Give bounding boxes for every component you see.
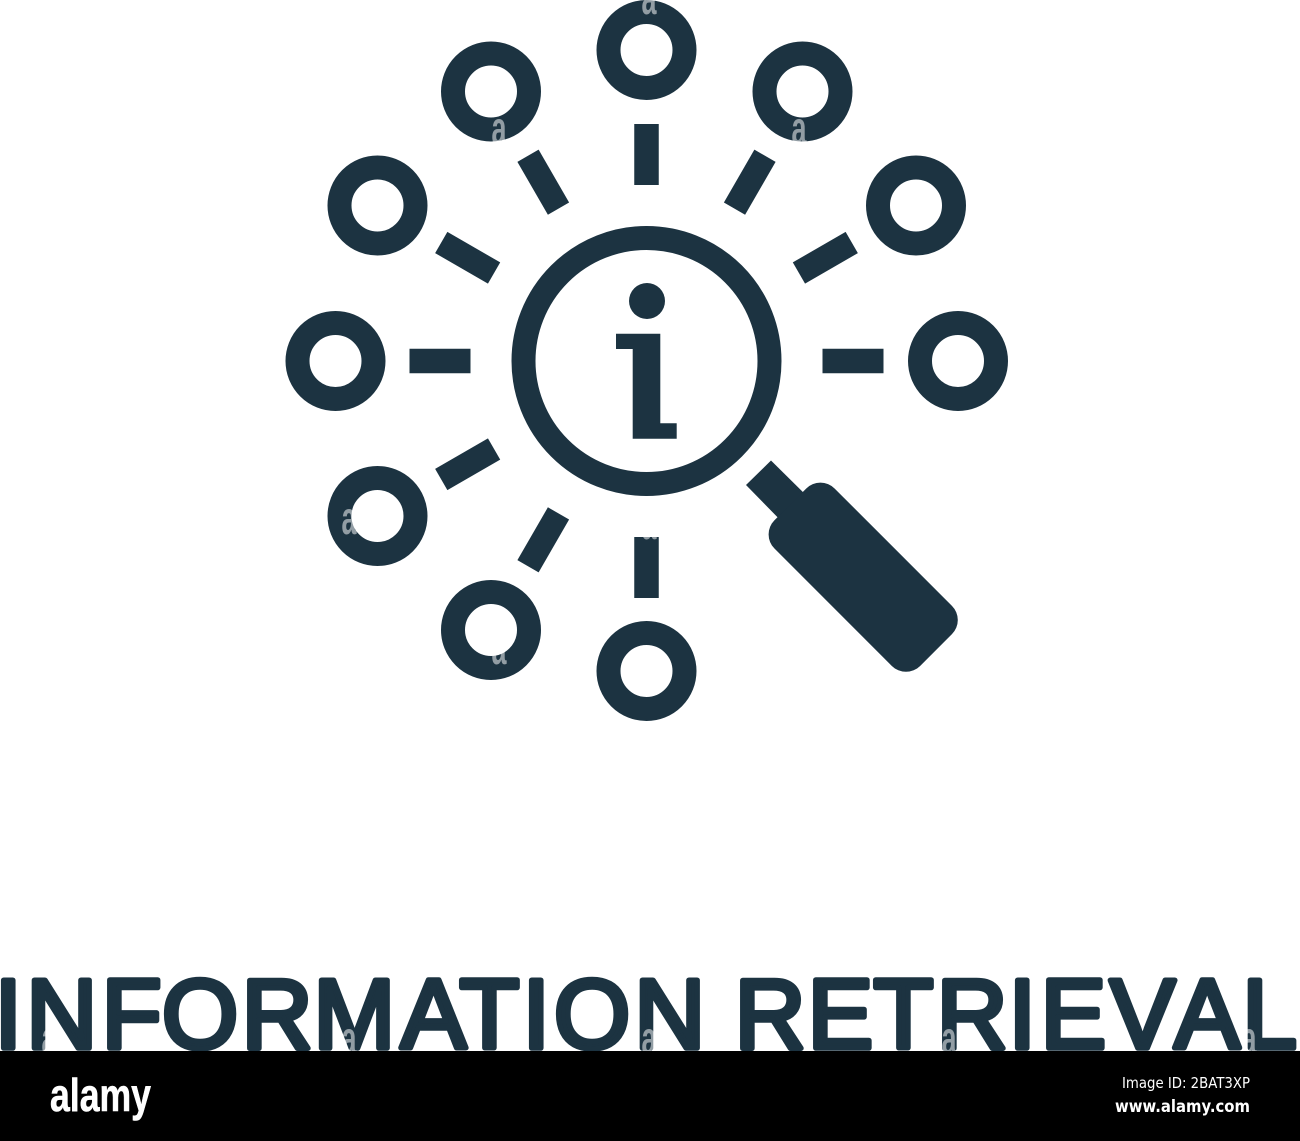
watermark glyphs: a [42, 1012, 57, 1064]
icon: magnifier handle [746, 460, 966, 680]
watermark glyphs: a [642, 497, 657, 549]
watermark glyphs: a [792, 102, 807, 154]
website address: www.alamy.com [1115, 1097, 1250, 1117]
watermark glyphs: a [642, 1012, 657, 1064]
icon: ring of outer nodes [298, 12, 996, 709]
footer band [0, 1051, 1300, 1141]
icon: letter i inside lens [616, 283, 677, 439]
watermark glyphs: a [342, 1012, 357, 1064]
watermark glyphs: a [492, 102, 507, 154]
watermark glyphs: a [342, 492, 357, 544]
watermark glyphs: a [492, 622, 507, 674]
icon: information retrieval magnifier with radiating nodes [298, 12, 996, 709]
icon: radial connector dashes [410, 124, 884, 598]
watermark glyphs: a [942, 1012, 957, 1064]
logo: alamy: alamy [50, 1069, 151, 1121]
icon: magnifier lens [524, 238, 770, 484]
image id: Image ID: 2BAT3XP [1122, 1074, 1250, 1092]
title: INFORMATION RETRIEVAL [0, 959, 1297, 1069]
watermark glyphs: a [1242, 1012, 1257, 1064]
